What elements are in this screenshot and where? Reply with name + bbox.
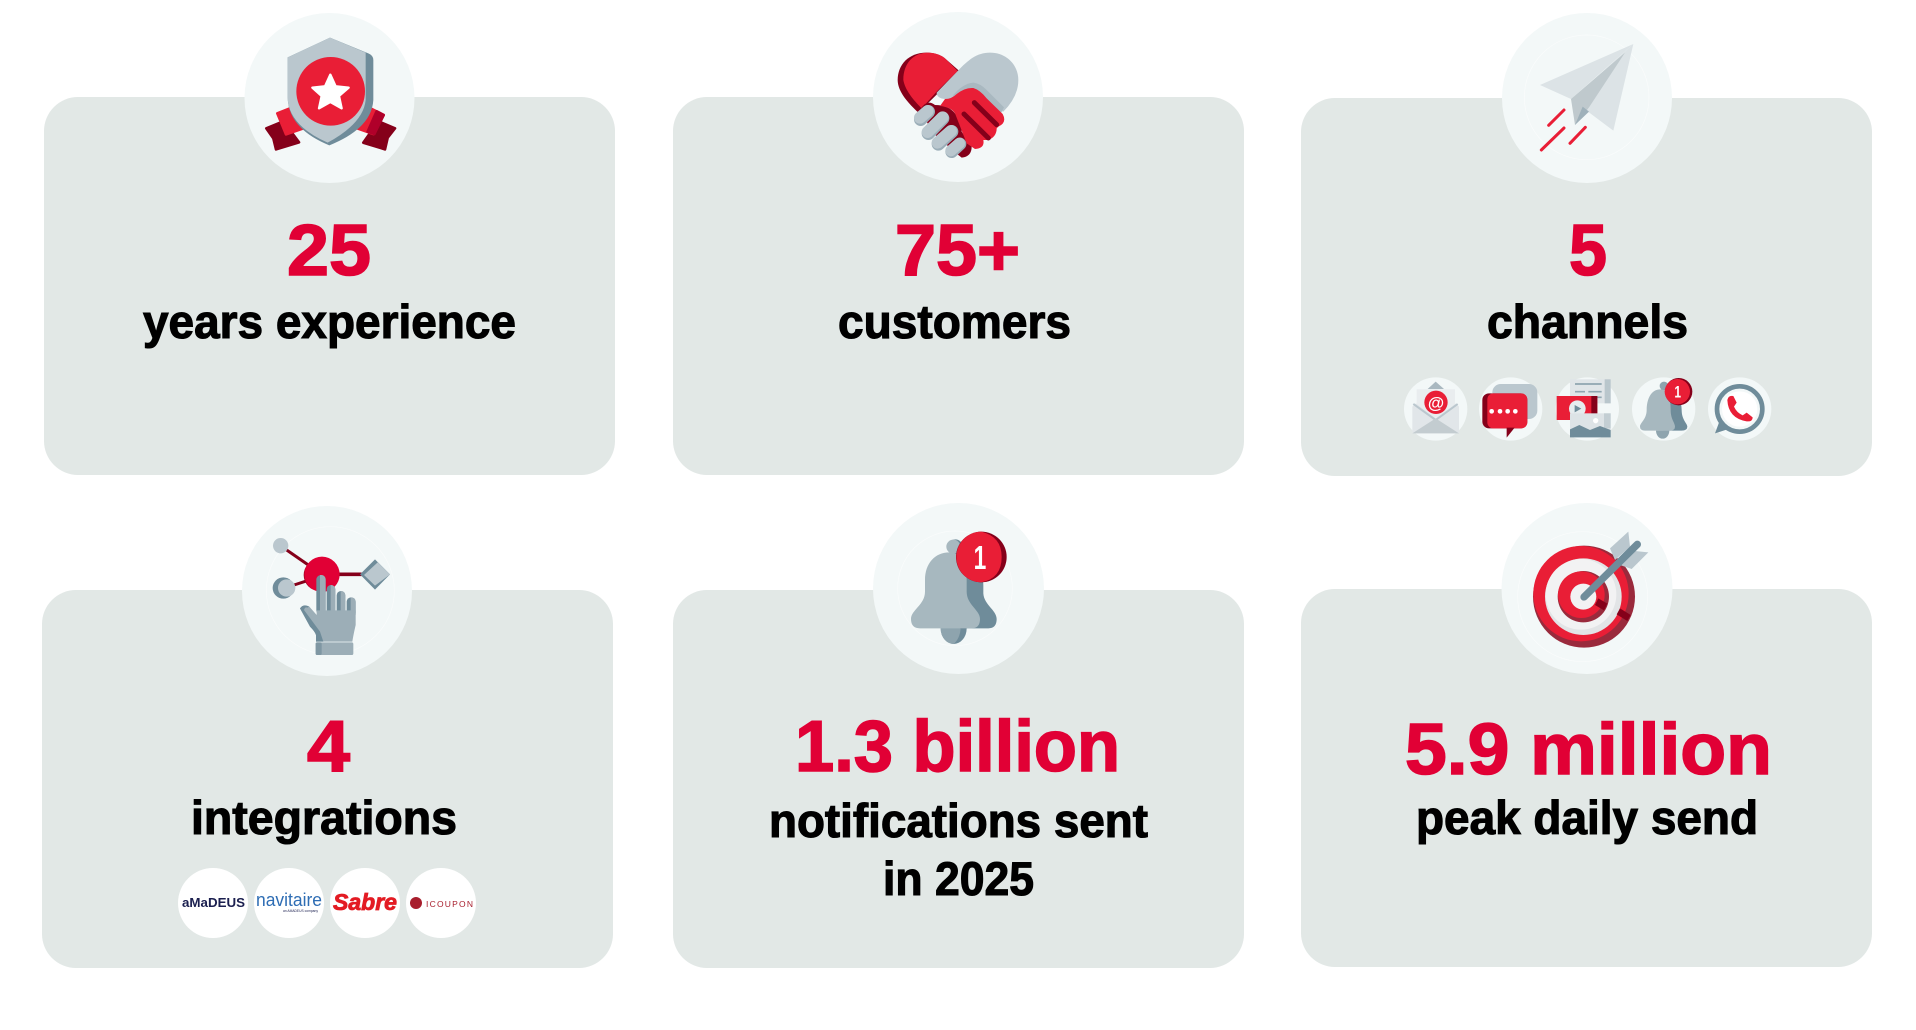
panel: peak daily send xyxy=(1301,503,1872,967)
label: notifications sent in 2025: in 2025 xyxy=(883,852,1034,905)
label: customers: customers xyxy=(838,295,1071,348)
logo: navitaire: an AMADEUS company xyxy=(283,909,318,913)
channel icons row xyxy=(1404,377,1771,441)
number: 1.3 billion: 1.3 billion xyxy=(795,707,1120,787)
logo: iCoupon xyxy=(406,868,476,938)
logo: amadeus xyxy=(178,868,248,938)
icon: email: @ xyxy=(1428,393,1444,412)
number: 4: 4 xyxy=(307,707,350,787)
icon: shield badge xyxy=(266,38,395,149)
label: channels: channels xyxy=(1487,295,1688,348)
icon: handshake heart xyxy=(898,53,1018,158)
number: 75+: 75+ xyxy=(895,211,1020,291)
icon: media message xyxy=(1556,377,1619,441)
panel: notifications xyxy=(673,503,1244,968)
label: peak daily send: peak daily send xyxy=(1416,791,1758,844)
icon: email xyxy=(1404,377,1467,441)
icon: notification bell xyxy=(898,531,1012,646)
logo: navitaire: navitaire xyxy=(256,890,322,910)
panel: customers xyxy=(673,12,1244,475)
icon: small bell: 1 xyxy=(1674,383,1681,402)
icon: notification bell: 1 xyxy=(974,540,986,577)
icon: small bell xyxy=(1632,377,1695,441)
icon: target with arrow xyxy=(1518,532,1648,662)
logo: Sabre: Sabre xyxy=(333,889,397,915)
label: notifications sent in 2025 xyxy=(769,794,1148,905)
icon: phone call bubble xyxy=(1708,377,1771,441)
label: integrations: integrations xyxy=(191,791,457,844)
icon: network touch xyxy=(266,527,394,655)
logo: iCoupon: ICOUPON xyxy=(426,899,473,909)
panel: channels xyxy=(1301,13,1872,476)
icon: paper plane xyxy=(1524,35,1649,160)
icon: chat bubble xyxy=(1479,377,1542,441)
number: 25: 25 xyxy=(287,211,371,291)
number: 5: 5 xyxy=(1569,211,1607,291)
number: 5.9 million: 5.9 million xyxy=(1405,710,1772,790)
logo: Sabre xyxy=(330,868,400,938)
icon: star xyxy=(312,75,349,108)
logo: navitaire xyxy=(254,868,324,938)
label: notifications sent in 2025: notifications sent xyxy=(769,794,1148,847)
panel: integrations xyxy=(42,506,613,968)
logo: amadeus: aMaDEUS xyxy=(182,895,245,910)
panel: years experience xyxy=(44,13,615,475)
label: years experience: years experience xyxy=(143,295,516,348)
